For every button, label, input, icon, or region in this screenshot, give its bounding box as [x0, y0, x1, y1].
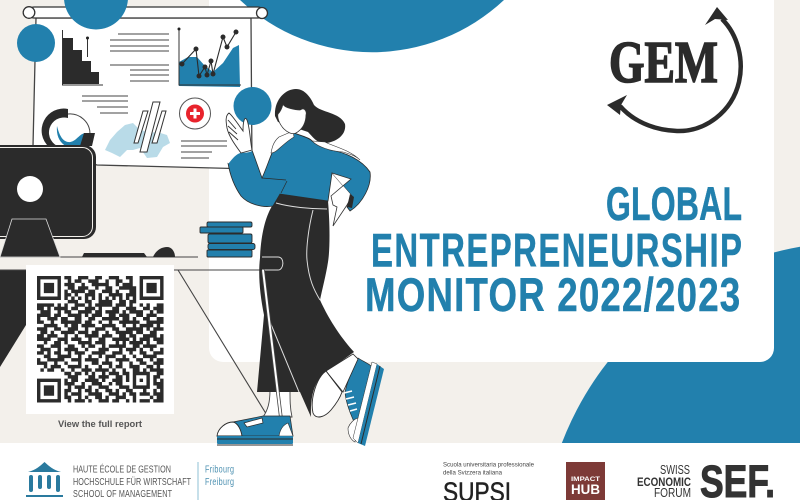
left shoe — [217, 416, 293, 445]
title: ENTREPRENEURSHIP — [371, 224, 742, 277]
sweater — [228, 133, 370, 211]
footer band — [0, 443, 800, 500]
large blue circle bottom right — [546, 247, 800, 500]
trouser seams — [262, 203, 327, 392]
blue circle top — [64, 0, 128, 29]
QR panel — [26, 265, 174, 414]
raised hand — [226, 113, 252, 153]
title: MONITOR 2022/2023 — [365, 269, 740, 321]
GEM logo: GEM — [609, 29, 718, 95]
SUPSI logo: della Svizzera italiana — [443, 470, 502, 476]
QR code — [37, 278, 164, 401]
Swiss Economic Forum logo: ECONOMIC — [637, 475, 691, 489]
GEM logo — [607, 7, 741, 131]
SUPSI logo: Scuola universitaria professionale — [443, 462, 534, 468]
Swiss Economic Forum logo — [637, 456, 775, 500]
SUPSI logo — [443, 462, 534, 500]
trousers — [257, 193, 354, 417]
mouse — [153, 247, 175, 257]
school name: HAUTE ÉCOLE DE GESTION — [73, 463, 171, 475]
right shoe — [312, 354, 384, 446]
screen roller — [23, 7, 268, 18]
desk lines — [0, 257, 284, 443]
school location — [205, 463, 234, 487]
Swiss flag badge — [180, 98, 210, 129]
books — [200, 222, 255, 257]
school name: HOCHSCHULE FÜR WIRTSCHAFT — [73, 476, 192, 487]
school name: SCHOOL OF MANAGEMENT — [73, 488, 173, 499]
Impact Hub logo: IMPACT — [571, 476, 600, 483]
title: GLOBAL — [606, 178, 742, 231]
computer monitor — [0, 145, 96, 257]
desk left leg — [0, 270, 26, 367]
map of Switzerland — [105, 123, 170, 158]
blue circle near hand — [234, 87, 272, 125]
white main panel — [209, 0, 774, 362]
woman illustration — [217, 89, 384, 446]
projector screen — [23, 7, 268, 169]
blue circle left — [17, 24, 55, 62]
hair — [275, 89, 345, 143]
school location: Fribourg — [205, 463, 234, 475]
desk leg highlight — [263, 270, 284, 443]
slanted bars — [134, 102, 166, 152]
title — [365, 178, 742, 321]
QR caption: View the full report — [58, 419, 143, 430]
donut chart — [42, 109, 95, 147]
sweater elbow seam — [262, 178, 287, 193]
school location: Freiburg — [205, 476, 234, 487]
text lines upper — [82, 34, 227, 158]
hand on hip — [347, 194, 354, 208]
blue circle top centre — [240, 0, 504, 52]
Impact Hub logo — [566, 462, 605, 500]
school name — [73, 463, 192, 499]
temple icon — [26, 462, 63, 497]
cuff — [228, 150, 252, 163]
Swiss Economic Forum logo: SWISS — [660, 463, 690, 477]
desk leg — [263, 270, 284, 443]
Swiss Economic Forum logo: FORUM — [654, 486, 691, 500]
area and line chart — [178, 28, 241, 87]
staircase chart — [62, 30, 103, 85]
ankles — [263, 390, 292, 417]
shirt tail — [331, 173, 352, 226]
face — [278, 104, 306, 134]
keyboard — [82, 253, 147, 257]
Impact Hub logo: HUB — [571, 482, 600, 497]
HEG school logo — [26, 462, 234, 500]
collar — [271, 131, 360, 160]
